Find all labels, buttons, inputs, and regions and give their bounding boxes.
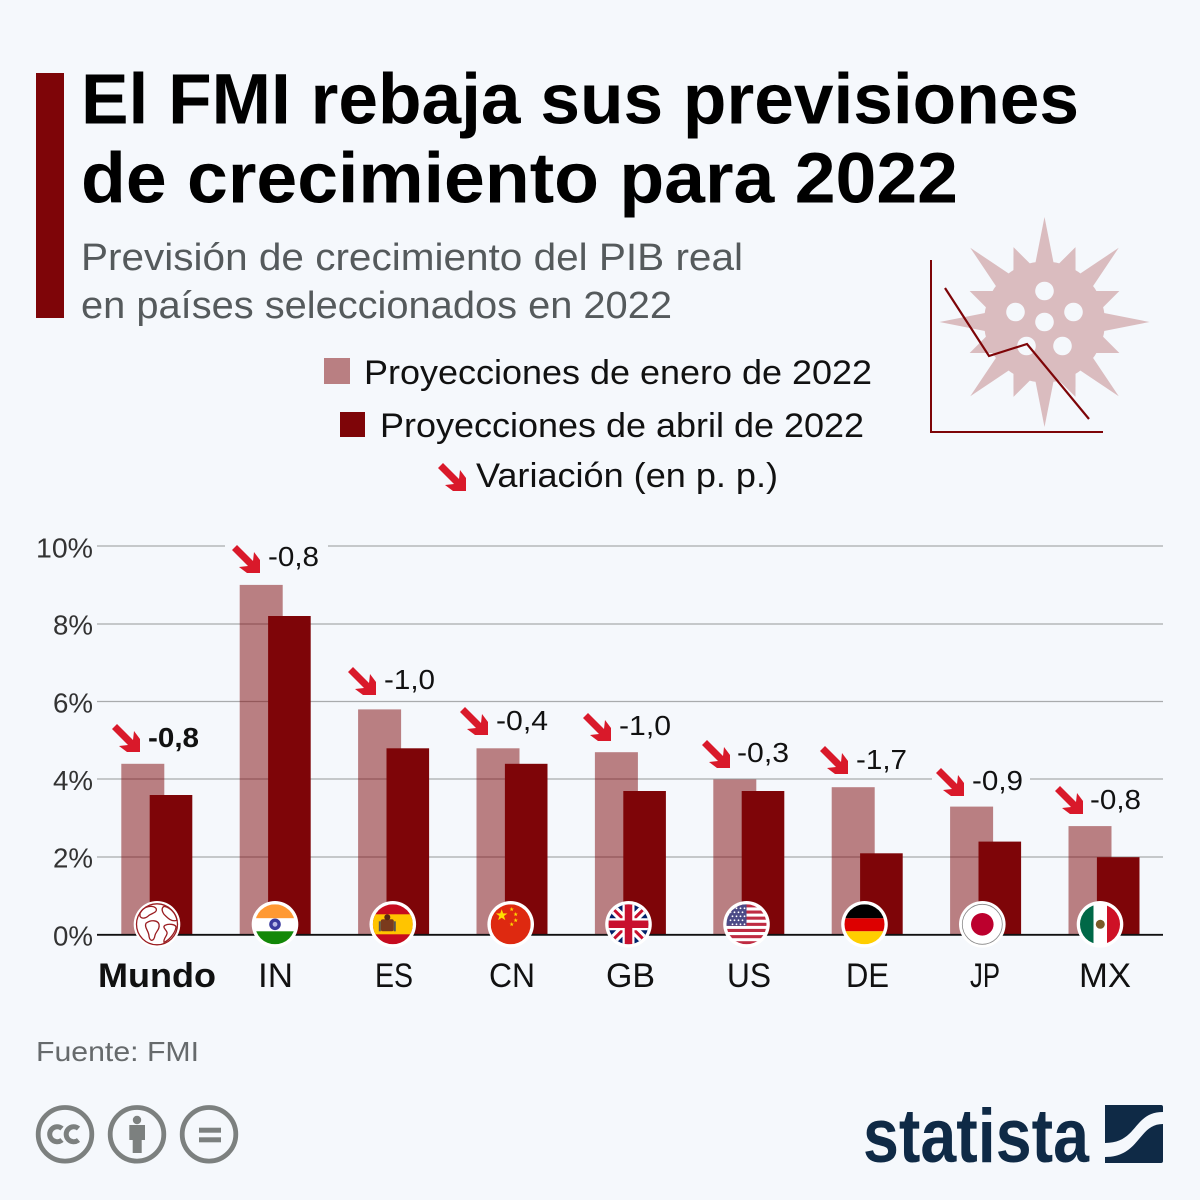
x axis labels: ES: [375, 957, 413, 995]
variation: MX: [1055, 784, 1141, 815]
icon: virus with falling line chart: [931, 217, 1150, 432]
variation labels: [112, 541, 1141, 815]
y axis labels: 2%: [53, 842, 93, 874]
variation: ES: [348, 664, 435, 695]
subtitle: [81, 237, 743, 327]
legend: January projections: Proyecciones de enero de 2022: [364, 354, 872, 392]
variation: IN: -0,8: [268, 541, 319, 572]
variation: CN: [460, 705, 548, 736]
title: El FMI rebaja sus previsiones: [81, 60, 1079, 140]
bars: April projections: [150, 616, 1139, 935]
legend: [324, 354, 872, 495]
icon: flag United Kingdom: [605, 901, 652, 948]
source: Fuente: FMI: [36, 1036, 199, 1067]
icon: flag Mexico: [1077, 901, 1123, 948]
x axis labels: IN: [258, 957, 293, 995]
title accent bar: [36, 73, 64, 318]
x axis labels: US: [727, 957, 771, 995]
subtitle: en países seleccionados en 2022: [81, 285, 672, 327]
legend: variation: Variación (en p. p.): [476, 457, 778, 495]
subtitle: Previsión de crecimiento del PIB real: [81, 237, 743, 279]
legend: April projections: Proyecciones de abril de 2022: [380, 407, 864, 445]
variation: US: -0,3: [737, 737, 789, 768]
x axis labels: [98, 957, 1131, 995]
variation: US: [702, 737, 789, 768]
gridlines: [97, 546, 1163, 857]
bar chart: [121, 585, 1140, 935]
variation: JP: [936, 765, 1023, 796]
variation: Mundo: [112, 722, 199, 753]
variation: DE: [820, 744, 907, 775]
y axis labels: 6%: [53, 688, 93, 718]
y axis labels: 0%: [53, 920, 93, 952]
x axis labels: Mundo: [98, 957, 216, 995]
variation: GB: -1,0: [619, 710, 671, 741]
variation: JP: -0,9: [972, 765, 1023, 796]
y axis labels: 10%: [36, 532, 93, 564]
variation: ES: -1,0: [384, 664, 435, 695]
icon: world globe: [134, 901, 180, 948]
icon: flag Japan: [959, 901, 1006, 948]
variation: MX: -0,8: [1090, 784, 1141, 815]
title: de crecimiento para 2022: [81, 140, 958, 218]
icon: flag Spain: [370, 901, 416, 948]
icon: CC: [38, 1108, 92, 1161]
variation: GB: [583, 710, 671, 741]
icon: flag China: [487, 901, 534, 948]
x axis labels: DE: [846, 957, 889, 995]
x axis labels: CN: [489, 957, 535, 995]
icon: flag United States: [723, 901, 770, 948]
x axis labels: MX: [1079, 957, 1131, 995]
y axis labels: 8%: [53, 610, 93, 640]
variation: DE: -1,7: [856, 744, 907, 775]
icon: flag India: [252, 901, 298, 948]
variation: IN: [232, 541, 319, 573]
x axis labels: GB: [606, 957, 655, 995]
x axis labels: JP: [970, 957, 1000, 995]
icon: no derivatives: [182, 1108, 236, 1161]
y axis labels: 4%: [53, 765, 93, 796]
y axis labels: [36, 532, 93, 952]
bars: January projections: [121, 585, 1112, 935]
title: [81, 60, 1079, 218]
icon: statista mark: [1105, 1105, 1163, 1163]
icon: flag Germany: [841, 901, 888, 948]
variation: Mundo: -0,8: [148, 722, 199, 753]
icon: creative commons licence: [38, 1108, 236, 1161]
icon: attribution: [110, 1108, 164, 1161]
statista logo: statista: [863, 1094, 1090, 1179]
x axis line: [97, 934, 1163, 936]
variation: CN: -0,4: [496, 705, 548, 736]
